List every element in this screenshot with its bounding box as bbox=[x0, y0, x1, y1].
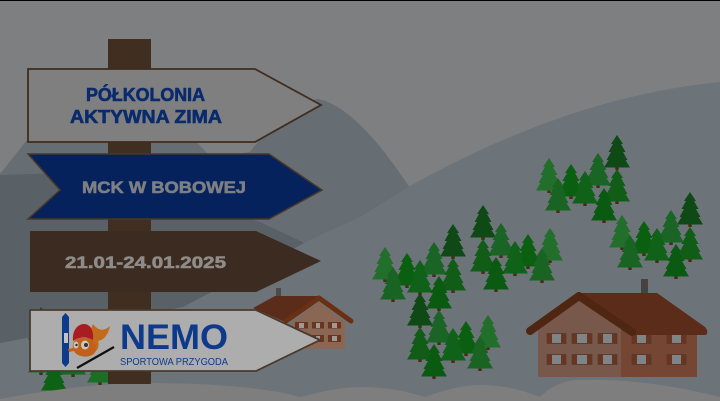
fish body bbox=[68, 338, 96, 357]
tree cluster: upper right bbox=[536, 135, 630, 223]
small house bbox=[253, 288, 351, 349]
tree cluster: centre bbox=[470, 205, 563, 292]
logo mascot bbox=[62, 313, 114, 368]
title text: AKTYWNA ZIMA bbox=[70, 107, 222, 127]
logo wordmark: NEMO bbox=[120, 318, 228, 357]
foreground snow bbox=[0, 380, 720, 401]
sign: dates bbox=[30, 231, 321, 292]
signpost bbox=[108, 39, 151, 384]
title text bbox=[70, 84, 222, 127]
eye bbox=[81, 340, 89, 350]
tree cluster: bottom bbox=[407, 293, 501, 379]
ski pole bbox=[77, 347, 114, 368]
location text: MCK W BOBOWEJ bbox=[82, 178, 246, 197]
sign: title bbox=[28, 69, 321, 142]
large house windows bbox=[547, 334, 686, 364]
sign: location bbox=[28, 154, 322, 219]
fish tail bbox=[86, 324, 110, 354]
hat bbox=[73, 324, 93, 341]
tree cluster: left of centre bbox=[372, 224, 466, 311]
tree group: lower left bbox=[28, 307, 113, 393]
sign: logo bbox=[30, 310, 320, 371]
tree cluster: far right bbox=[609, 192, 703, 279]
snowy hillside bbox=[0, 82, 720, 401]
title text: PÓŁKOLONIA bbox=[86, 84, 205, 105]
mountains bbox=[0, 90, 410, 345]
logo wordmark: SPORTOWA PRZYGODA bbox=[120, 357, 228, 368]
dates text: 21.01-24.01.2025 bbox=[65, 253, 226, 272]
ski bbox=[62, 313, 69, 367]
large house bbox=[530, 279, 707, 377]
